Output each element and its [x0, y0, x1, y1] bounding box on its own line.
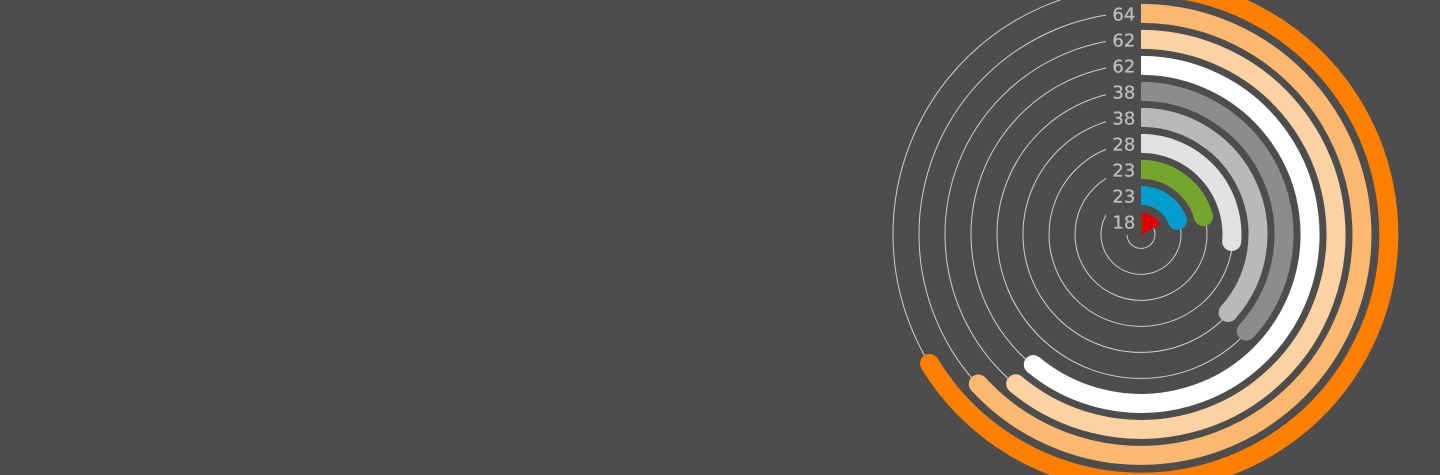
value labels: 38: [1112, 82, 1135, 103]
value labels: 38: [1112, 108, 1135, 129]
value labels: 62: [1112, 56, 1135, 77]
bar: 62, light orange: [1006, 39, 1336, 429]
bar: 18, red wedge: [1141, 213, 1161, 235]
value labels: 64: [1112, 4, 1135, 25]
value labels: 18: [1112, 213, 1135, 234]
value labels: [1112, 4, 1135, 234]
value labels: 23: [1112, 186, 1135, 208]
value labels: 23: [1112, 160, 1135, 181]
bar: 28, light grey: [1141, 143, 1241, 251]
bar: 62, white: [1024, 65, 1310, 403]
value labels: 62: [1112, 30, 1135, 51]
bar: 38, mid grey: [1141, 117, 1258, 322]
bar: 64, mid orange: [969, 13, 1362, 455]
bar: 23, green: [1141, 169, 1213, 226]
bar: 23, blue: [1141, 195, 1187, 230]
bar: orange, outermost ring: [920, 0, 1389, 475]
value labels: 28: [1112, 134, 1135, 155]
bar: 38, dark grey: [1141, 91, 1284, 341]
